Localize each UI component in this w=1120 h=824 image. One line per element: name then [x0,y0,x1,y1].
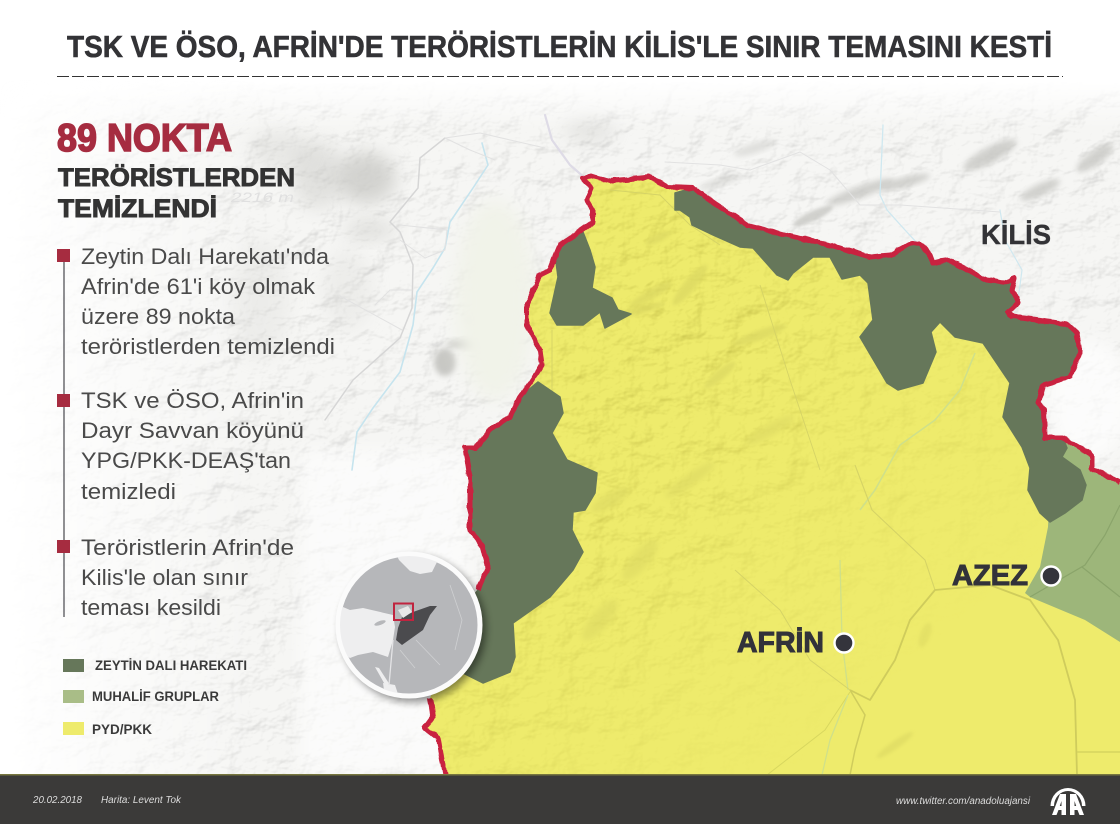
subheading: TEMİZLENDİ [58,195,217,223]
bullet 2: YPG/PKK-DEAŞ'tan [81,448,291,473]
legend [63,658,247,737]
footer date: 20.02.2018 [32,795,82,806]
legend item: Zeytin Dalı Harekatı: ZEYTİN DALI HAREKATI [95,658,247,673]
heading: 89 NOKTA: 89 NOKTA [57,117,232,160]
footer twitter address: www.twitter.com/anadoluajansi [896,796,1031,807]
bullet 2: TSK ve ÖSO, Afrin'in [81,388,304,413]
faint elevation label: 2216 m [230,189,294,205]
bullet timeline line [63,258,65,617]
inset locator map [330,552,486,702]
map: Olive Branch area, west (dark green) [440,382,597,683]
city marker: Azez [952,560,1060,592]
bullet 3: Kilis'le olan sınır [81,565,248,590]
legend item: Muhalif Gruplar: MUHALİF GRUPLAR [92,689,219,704]
title rule [57,76,1063,78]
city marker: Azez: AZEZ [952,560,1028,592]
subheading [58,163,295,223]
bullet 1: Afrin'de 61'i köy olmak [81,274,316,299]
bullet 1 [57,244,335,359]
legend item: PYD/PKK [63,722,152,737]
map: Olive Branch area, north band (dark green) [675,188,1086,522]
map: border line (red) [425,176,1120,775]
bullet 3 [57,535,294,620]
footer credit: Harita: Levent Tok [101,795,182,806]
bullet 1: teröristlerden temizlendi [81,334,335,359]
map: opposition groups area (light green) [1025,438,1120,642]
icon: AA logo [1050,788,1086,815]
map: PYD/PKK territory (yellow) [425,170,1120,780]
subheading: TERÖRİSTLERDEN [58,163,295,192]
legend item: PYD/PKK: PYD/PKK [92,722,152,737]
bullet 2: Dayr Savvan köyünü [81,418,304,443]
label: Kilis: KİLİS [981,219,1051,250]
bullet 1: Zeytin Dalı Harekatı'nda [81,244,330,269]
bullet 2: temizledi [81,479,176,504]
city marker: Afrin: AFRİN [737,627,824,659]
bullet 3: teması kesildi [81,595,221,620]
bullet 3: Teröristlerin Afrin'de [81,535,294,560]
bullet 2 [57,388,304,504]
roads across opposition area [1030,505,1120,597]
roads and rivers on the base map [325,115,1022,470]
footer bar [0,774,1120,824]
map: Olive Branch area, north-west pocket (dark green) [550,232,631,328]
bullet 1: üzere 89 nokta [81,304,236,329]
